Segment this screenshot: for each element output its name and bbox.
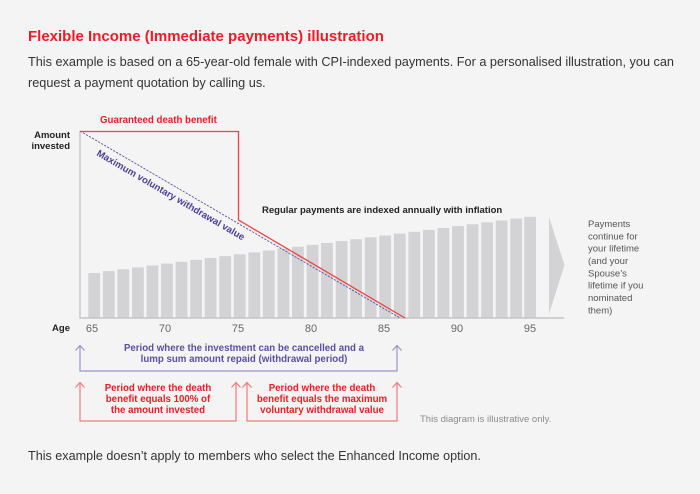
chart axes [80,131,564,318]
label: amount invested: Amount [34,130,71,141]
text: maximum withdrawal death benefit: Period where the death [269,383,375,394]
age axis labels: 70 [159,323,171,335]
text: 100 percent death benefit [105,383,211,416]
label: age: Age [52,323,70,334]
label: payments continue for lifetime: continue for [588,231,638,242]
label: regular payments: Regular payments are indexed annually with inflation [262,205,502,216]
age axis labels: 95 [524,323,536,335]
label: amount invested [31,130,71,152]
label: payments continue for lifetime [588,219,643,316]
bracket: maximum withdrawal death benefit [242,382,402,421]
label: payments continue for lifetime: them) [588,305,612,316]
text: 100 percent death benefit: the amount invested [111,405,205,416]
line: maximum voluntary withdrawal value [80,131,400,318]
title: Flexible Income (Immediate payments) illustration [28,28,384,45]
intro text: This example is based on a 65-year-old female with CPI-indexed payments. For a personalised illustration, you can [28,55,674,69]
label: payments continue for lifetime: lifetime if you [588,281,643,292]
age axis labels: 90 [451,323,463,335]
bar chart: regular payments [88,217,536,318]
line: guaranteed death benefit [80,132,405,318]
footer note: This example doesn’t apply to members who select the Enhanced Income option. [28,449,481,463]
label: payments continue for lifetime: Payments [588,219,630,230]
text: maximum withdrawal death benefit: benefit equals the maximum [257,394,388,405]
text: 100 percent death benefit: benefit equals 100% of [106,394,211,405]
intro text: request a payment quotation by calling us. [28,76,266,90]
text: withdrawal period: Period where the investment can be cancelled and a [124,343,365,354]
age axis labels [86,323,536,335]
note: illustrative only: This diagram is illustrative only. [420,414,551,425]
age axis labels: 80 [305,323,317,335]
text: maximum withdrawal death benefit: voluntary withdrawal value [260,405,385,416]
intro text [28,55,674,90]
text: withdrawal period: lump sum amount repaid (withdrawal period) [141,354,347,365]
text: 100 percent death benefit: Period where the death [105,383,211,394]
age axis labels: 85 [378,323,390,335]
age axis labels: 65 [86,323,98,335]
arrow: payments continue [549,217,564,314]
label: maximum voluntary withdrawal value: Maximum voluntary withdrawal value [94,148,246,243]
label: payments continue for lifetime: (and your [588,256,628,267]
bracket: 100 percent death benefit [76,382,240,421]
bracket: withdrawal period [76,346,402,371]
label: guaranteed death benefit: Guaranteed death benefit [100,115,218,126]
label: payments continue for lifetime: Spouse’s [588,268,627,279]
age axis labels: 75 [232,323,244,335]
label: payments continue for lifetime: your lifetime [588,244,639,255]
label: amount invested: invested [31,141,70,152]
label: payments continue for lifetime: nominated [588,293,632,304]
text: maximum withdrawal death benefit [257,383,388,416]
text: withdrawal period [124,343,365,365]
